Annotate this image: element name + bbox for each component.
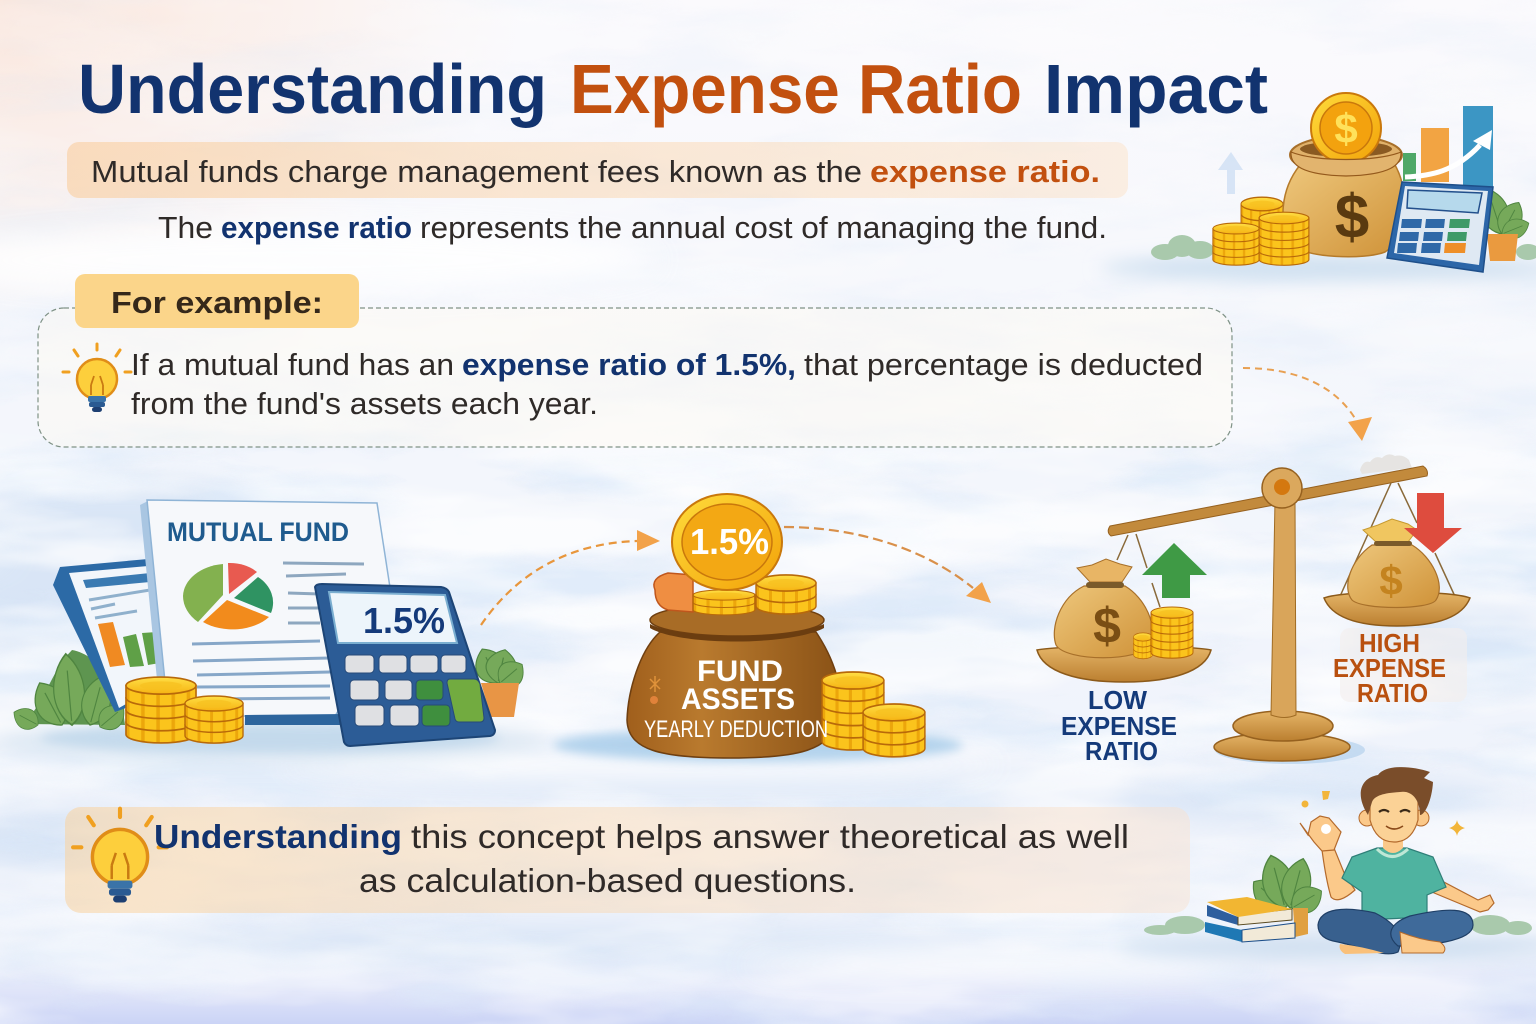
intro highlight band [67,142,1128,198]
takeaway band [65,807,1190,913]
main document: MUTUAL FUND [167,517,349,547]
arrow: calculator to fund assets [481,530,660,625]
title: Expense Ratio [570,50,1022,128]
label: low expense ratio: RATIO [1085,736,1158,766]
title [78,50,1268,128]
calculator: 1.5% [363,600,445,641]
label: low expense ratio: LOW [1088,685,1147,715]
intro highlight band: Mutual funds charge management fees known as the [91,154,862,189]
books [1205,897,1295,942]
illustration: balance scale [1037,454,1470,766]
arrow: down [1404,493,1462,553]
definition sentence: expense ratio [221,210,412,245]
icon: light bulb [73,809,167,903]
intro highlight band: expense ratio. [870,154,1100,189]
calculator [315,584,495,746]
label: low expense ratio: EXPENSE [1061,711,1177,741]
example text: from the fund's assets each year. [131,386,598,421]
illustration: money bag with calculator and chart [1100,93,1536,281]
arrow: fund assets to scale [784,527,991,603]
label: high expense ratio: RATIO [1357,678,1428,708]
takeaway text [154,818,1129,899]
pie chart [183,563,273,629]
arrow: example to scale [1243,368,1372,441]
example card [38,274,1232,447]
takeaway text: Understanding [154,818,402,855]
student [1300,767,1494,954]
illustration: money bag with calculator and chart: $ [1335,183,1369,252]
left pan: $ [1093,598,1121,654]
label: low expense ratio [1061,685,1177,766]
illustration: fund assets pot [553,494,963,762]
illustration: money bag with calculator and chart: $ [1334,105,1358,152]
plants [9,650,131,736]
coin: 1.5% [672,494,782,590]
takeaway text: this concept helps answer theoretical as well [411,818,1129,855]
definition sentence: The [158,210,213,245]
takeaway text: as calculation-based questions. [359,862,856,899]
right pan: $ [1379,557,1403,604]
arrow: up [1142,543,1207,598]
label: high expense ratio: HIGH [1359,628,1420,658]
example text: expense ratio of 1.5%, [462,347,796,382]
left pan [1037,543,1211,682]
illustration: mutual fund documents [0,500,550,762]
illustration: meditating student with books [1120,767,1536,959]
sparkles [1302,791,1465,836]
label: high expense ratio [1333,628,1467,708]
label: high expense ratio: EXPENSE [1333,653,1446,683]
label: for example: For example: [111,285,323,320]
label: for example [75,274,359,328]
example text [131,347,1203,421]
right pan [1324,493,1470,626]
title: Impact [1044,50,1268,128]
example text: that percentage is deducted [804,347,1203,382]
definition sentence: represents the annual cost of managing the fund. [420,210,1107,245]
main document [140,500,395,725]
coins [126,677,243,743]
back report [53,559,175,712]
potted plant [469,643,530,717]
title: Understanding [78,50,547,128]
coin: 1.5%: 1.5% [690,521,769,562]
pot label [644,655,828,743]
example text: If a mutual fund has an [131,347,454,382]
pot label: YEARLY DEDUCTION [644,716,828,743]
plant and pot [1245,851,1328,937]
icon: light bulb [63,344,131,412]
pot label: ASSETS [681,683,795,716]
pot label: FUND [697,655,783,688]
